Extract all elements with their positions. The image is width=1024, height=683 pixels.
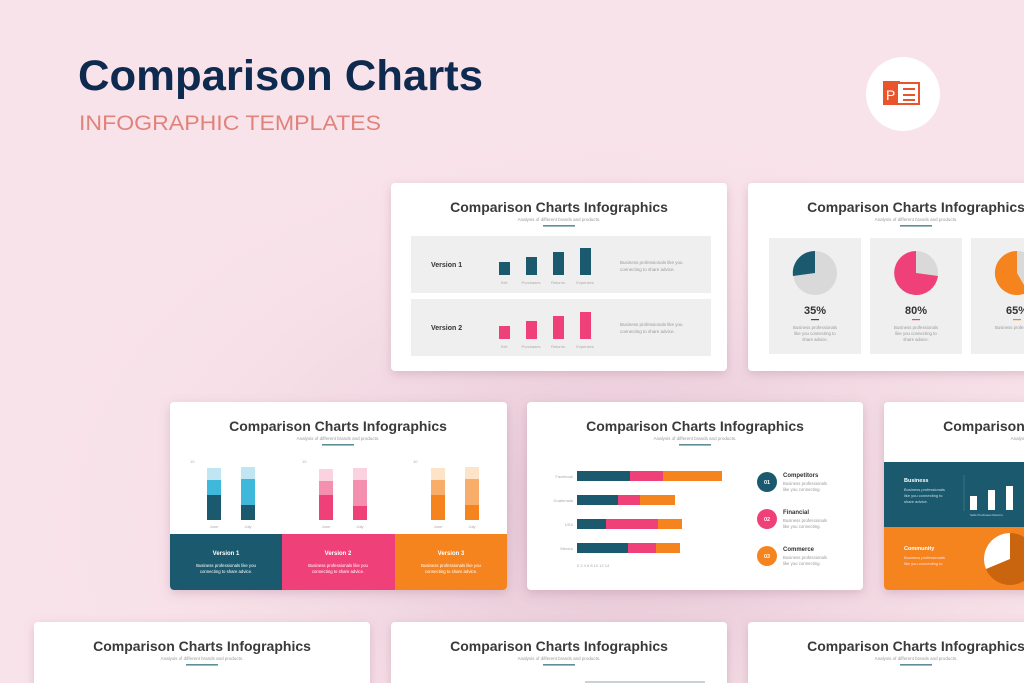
card: bottom 2: [391, 622, 727, 683]
legend: competitors: [757, 472, 827, 492]
row: version 2: Sell: [501, 344, 507, 349]
pie 35%: 35%: [804, 305, 826, 317]
stacked chart pink: June: [322, 524, 331, 529]
band: business: [884, 462, 1024, 527]
stacked chart pink: July: [356, 524, 364, 529]
stacked chart teal: June: [210, 524, 219, 529]
stacked chart orange: July: [468, 524, 476, 529]
footer: version 3: Business professionals like you: [421, 563, 481, 568]
legend: commerce: [757, 546, 827, 566]
footer: version 2: [282, 534, 395, 590]
card: bottom 1: [34, 622, 370, 683]
band: business: share advice.: [904, 499, 928, 504]
stacked chart teal: July: [244, 524, 252, 529]
legend: commerce: Business professionals: [783, 555, 827, 560]
horizontal bar chart: [553, 471, 722, 568]
row: version 2: connecting to share advice.: [620, 329, 675, 334]
stacked chart teal: 10: [190, 459, 195, 464]
horizontal bar chart: Guatemala: [553, 498, 574, 503]
legend: financial: Financial: [783, 510, 809, 516]
horizontal bar chart: Mexico: [560, 546, 574, 551]
card: stacked bars versions: [170, 402, 507, 590]
band: business: like you connecting to: [904, 493, 943, 498]
footer: version 1: connecting to share advice.: [200, 569, 252, 574]
legend: competitors: 01: [764, 480, 770, 486]
pie 35%: like you connecting to: [794, 331, 836, 336]
stacked chart pink: 10: [302, 459, 307, 464]
pie 65%: [971, 238, 1024, 354]
row: version 1: connecting to share advice.: [620, 267, 675, 272]
row: version 1: Purchases: [522, 280, 540, 285]
horizontal bar chart: USA: [565, 522, 573, 527]
legend: financial: like you connecting.: [783, 524, 821, 529]
row: version 1: Expenses: [576, 280, 594, 285]
horizontal bar chart: Facebook: [555, 474, 573, 479]
legend: competitors: Business professionals: [783, 481, 827, 486]
row: version 2: Returns: [551, 344, 565, 349]
band: community: Business professionals: [904, 555, 945, 560]
title: Comparison Charts: [78, 52, 483, 100]
card: bottom 3: [748, 622, 1024, 683]
legend: commerce: Commerce: [783, 547, 815, 553]
legend: commerce: like you connecting.: [783, 561, 821, 566]
legend: commerce: 03: [764, 554, 770, 560]
legend: financial: 02: [764, 517, 770, 523]
row: version 1: Version 1: [431, 262, 462, 269]
subtitle: INFOGRAPHIC TEMPLATES: [79, 112, 381, 135]
row: version 1: Business professionals like you: [620, 260, 683, 265]
footer: version 3: Version 3: [438, 551, 465, 557]
stacked chart orange: 10: [413, 459, 418, 464]
footer: version 1: Business professionals like you: [196, 563, 256, 568]
footer: version 3: connecting to share advice.: [425, 569, 477, 574]
stacked chart pink: [302, 459, 367, 529]
pie 35%: Business professionals: [793, 325, 837, 330]
stacked chart teal: [190, 459, 255, 529]
pie 35%: [769, 238, 861, 354]
pie 80%: like you connecting to: [895, 331, 937, 336]
footer: version 2: connecting to share advice.: [312, 569, 364, 574]
pie 80%: share advice.: [903, 337, 929, 342]
legend: financial: Business professionals: [783, 518, 827, 523]
band: business: Business: [904, 478, 928, 484]
footer: version 2: Business professionals like you: [308, 563, 368, 568]
pie 35%: share advice.: [802, 337, 828, 342]
legend: competitors: like you connecting.: [783, 487, 821, 492]
band: community: [884, 527, 1024, 590]
stacked chart orange: June: [434, 524, 443, 529]
band: business: Business professionals: [904, 487, 945, 492]
row: version 2: Expenses: [576, 344, 594, 349]
icon: powerpoint: [866, 57, 940, 131]
row: version 1: Returns: [551, 280, 565, 285]
pie 80%: [870, 238, 962, 354]
footer: version 3: [395, 534, 507, 590]
card: vertical bars versions: [391, 183, 727, 371]
row: version 2: Version 2: [431, 325, 462, 332]
pie 80%: 80%: [905, 305, 927, 317]
card: business/community: [884, 402, 1024, 590]
row: version 2: Purchases: [522, 344, 540, 349]
footer: version 1: [170, 534, 282, 590]
legend: competitors: Competitors: [783, 473, 819, 479]
pie 80%: Business professionals: [894, 325, 938, 330]
card: horizontal stacked bars: [527, 402, 863, 590]
footer: version 1: Version 1: [213, 551, 240, 557]
band: business: Sells Purchases Returns: [970, 513, 1003, 517]
card: pie charts: [748, 183, 1024, 371]
row: version 2: Business professionals like you: [620, 322, 683, 327]
stacked chart orange: [413, 459, 479, 529]
band: community: Community: [904, 546, 935, 552]
row: version 1: Sell: [501, 280, 507, 285]
icon: powerpoint: P: [886, 87, 895, 103]
legend: financial: [757, 509, 827, 529]
band: community: like you connecting to: [904, 561, 943, 566]
horizontal bar chart: 0 2 4 6 8 10 12 14: [577, 563, 610, 568]
row: version 1: [411, 236, 711, 293]
footer: version 2: Version 2: [325, 551, 352, 557]
row: version 2: [411, 299, 711, 356]
